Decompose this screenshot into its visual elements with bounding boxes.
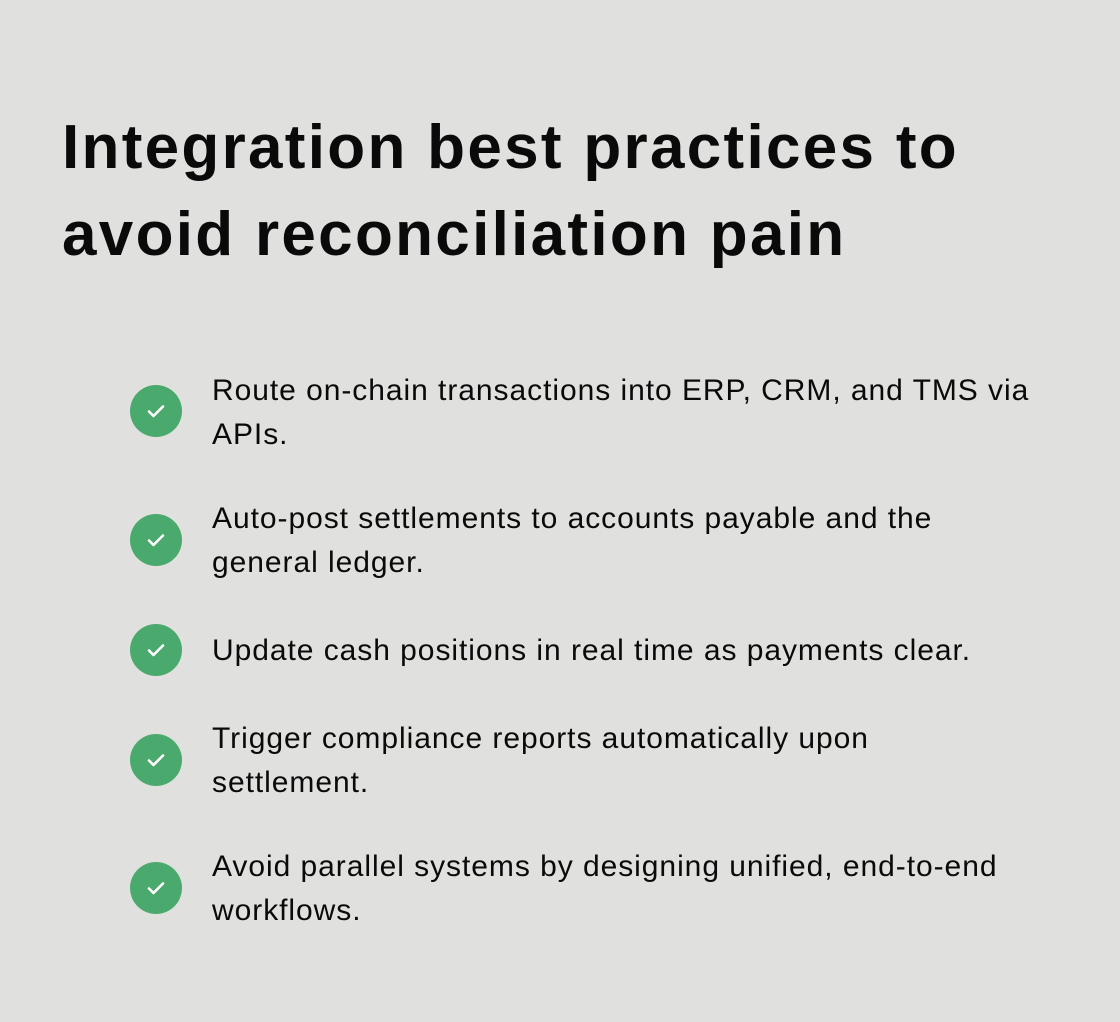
text: general ledger.	[212, 546, 425, 579]
text	[212, 374, 1029, 451]
title: avoid reconciliation pain	[62, 200, 846, 269]
text: Trigger compliance reports automatically upon	[212, 722, 869, 755]
text: settlement.	[212, 766, 369, 799]
text: APIs.	[212, 418, 288, 451]
title	[62, 113, 959, 269]
icon: check	[130, 862, 182, 914]
text: Auto-post settlements to accounts payable and the	[212, 502, 932, 535]
item 2	[130, 502, 932, 579]
text: Update cash positions in real time as payments clear.	[212, 634, 971, 667]
item 5	[130, 850, 997, 927]
text	[212, 722, 869, 799]
text	[212, 502, 932, 579]
item 4	[130, 722, 869, 799]
icon: check	[130, 624, 182, 676]
text	[212, 850, 997, 927]
text: Route on-chain transactions into ERP, CRM, and TMS via	[212, 374, 1029, 407]
icon: check	[130, 514, 182, 566]
text: workflows.	[212, 894, 362, 927]
item 1	[130, 374, 1029, 451]
title: Integration best practices to	[62, 113, 959, 182]
item 3	[130, 624, 971, 676]
icon: check	[130, 385, 182, 437]
text: Avoid parallel systems by designing unified, end-to-end	[212, 850, 997, 883]
icon: check	[130, 734, 182, 786]
